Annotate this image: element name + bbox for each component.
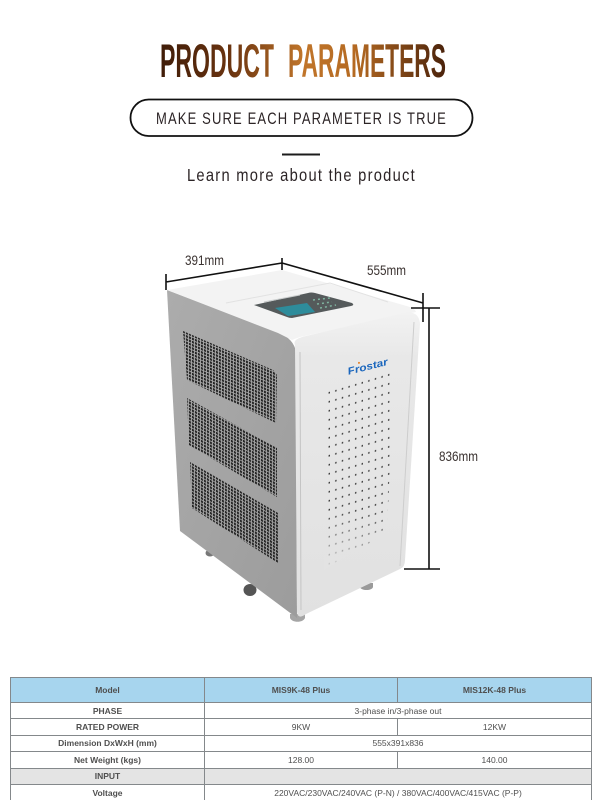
specification table: INPUT bbox=[95, 771, 120, 781]
dimension: height 836mm bbox=[404, 308, 478, 569]
specification table: 140.00 bbox=[482, 755, 508, 765]
cabinet front face bbox=[294, 312, 420, 617]
specification table: Net Weight (kgs) bbox=[74, 755, 141, 765]
front panel right edge bbox=[400, 322, 414, 566]
logo: Frostar bbox=[346, 355, 390, 378]
specification table: Model bbox=[95, 685, 120, 695]
specification table: 220VAC/230VAC/240VAC (P-N) / 380VAC/400VAC/415VAC (P-P) bbox=[274, 788, 522, 798]
dimension: width 391mm bbox=[166, 252, 282, 290]
dimension: depth 555mm bbox=[282, 262, 423, 322]
specification table: Voltage bbox=[92, 788, 123, 798]
specification table: MIS9K-48 Plus bbox=[272, 685, 330, 695]
specification table: RATED POWER bbox=[76, 722, 139, 732]
vent grille 1 bbox=[183, 331, 277, 423]
specification table: 12KW bbox=[483, 722, 506, 732]
logo: Frostar: Frostar bbox=[347, 357, 390, 378]
short divider bbox=[282, 154, 320, 156]
vent grille 2 bbox=[187, 398, 277, 497]
subtitle pill: MAKE SURE EACH PARAMETER IS TRUE bbox=[156, 109, 447, 128]
top seam bbox=[226, 283, 388, 303]
specification table: MIS12K-48 Plus bbox=[463, 685, 526, 695]
specification table: 9KW bbox=[292, 722, 310, 732]
cabinet side face bbox=[167, 290, 297, 618]
dimension: depth 555mm: 555mm bbox=[367, 262, 406, 278]
title: PRODUCT bbox=[160, 34, 274, 87]
dimension: height 836mm: 836mm bbox=[439, 448, 478, 464]
specification table: 3-phase in/3-phase out bbox=[355, 706, 441, 716]
specification table: PHASE bbox=[93, 706, 122, 716]
control panel bbox=[254, 292, 353, 318]
specification table: Dimension DxWxH (mm) bbox=[58, 738, 157, 748]
dimension: width 391mm: 391mm bbox=[185, 252, 224, 268]
subtitle pill bbox=[130, 100, 472, 136]
perforated front dots bbox=[324, 371, 394, 570]
icon: cabinet feet bbox=[206, 550, 373, 622]
vent grille 3 bbox=[190, 462, 278, 563]
front panel inner rim bbox=[300, 352, 301, 610]
tagline: Learn more about the product bbox=[187, 165, 416, 185]
cabinet top face bbox=[167, 270, 416, 340]
product: energy storage cabinet bbox=[167, 270, 420, 622]
specification table: 555x391x836 bbox=[372, 738, 424, 748]
specification table bbox=[10, 677, 592, 800]
specification table: 128.00 bbox=[288, 755, 314, 765]
